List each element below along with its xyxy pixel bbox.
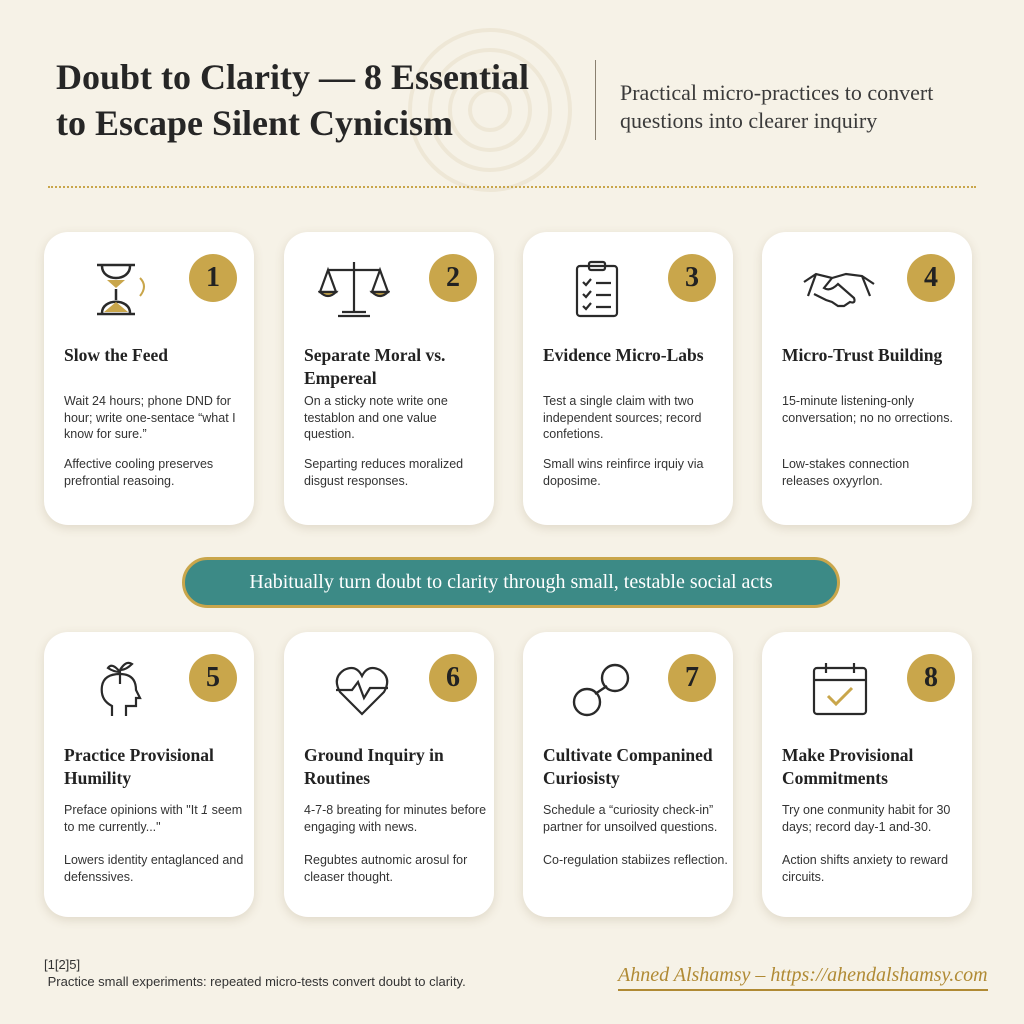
number 2 — [429, 254, 477, 302]
card 4 — [762, 232, 972, 525]
card 1: Wait 24 hours; phone DND for hour; write one-sentace “what I know for sure.” — [64, 394, 236, 441]
number 7: 7 — [685, 662, 699, 693]
title — [56, 57, 529, 143]
number 5 — [189, 654, 237, 702]
card 5: Lowers identity entaglanced and defenssives. — [64, 853, 243, 884]
signature: Ahned Alshamsy – https://ahendalshamsy.com — [618, 964, 988, 986]
card 8: Try one conmunity habit for 30 days; record day-1 and-30. — [782, 803, 950, 834]
footer references: Practice small experiments: repeated micro-tests convert doubt to clarity. — [48, 974, 466, 989]
icon: link — [572, 664, 630, 716]
icon: heart — [336, 666, 388, 716]
card 7: Co-regulation stabiizes reflection. — [543, 853, 728, 867]
card 3: Small wins reinfirce irquiy via doposime. — [543, 457, 703, 488]
card 2: Separting reduces moralized disgust responses. — [304, 457, 463, 488]
card 7: Schedule a “curiosity check-in” partner for unsoilved questions. — [543, 803, 717, 834]
card title: Ground Inquiry in Routines — [304, 745, 444, 788]
number 1: 1 — [206, 262, 220, 293]
number 3 — [668, 254, 716, 302]
number 4: 4 — [924, 262, 938, 293]
banner — [182, 557, 840, 608]
card 8: Action shifts anxiety to reward circuits. — [782, 853, 948, 884]
number 8: 8 — [924, 662, 938, 693]
number 7 — [668, 654, 716, 702]
decorative spiral — [408, 28, 572, 192]
card title: Micro-Trust Building — [782, 345, 942, 365]
number 4 — [907, 254, 955, 302]
footer references: [1[2]5] — [44, 957, 80, 972]
number 8 — [907, 654, 955, 702]
number 1 — [189, 254, 237, 302]
card 6: Regubtes autnomic arosul for cleaser thought. — [304, 853, 467, 884]
card 6: 4-7-8 breating for minutes before engaging with news. — [304, 803, 486, 834]
title: Doubt to Clarity — 8 Essential — [56, 57, 529, 97]
card title: Cultivate Companined Curiosisty — [543, 745, 713, 788]
card title: Slow the Feed — [64, 345, 168, 365]
card 3 — [523, 232, 733, 525]
number 6 — [429, 654, 477, 702]
banner: Habitually turn doubt to clarity through small, testable social acts — [249, 571, 773, 593]
subtitle: Practical micro-practices to convert — [620, 80, 933, 105]
card title: Evidence Micro-Labs — [543, 345, 704, 365]
number 2: 2 — [446, 262, 460, 293]
number 5: 5 — [206, 662, 220, 693]
number 6: 6 — [446, 662, 460, 693]
card 5 — [44, 632, 254, 917]
number 3: 3 — [685, 262, 699, 293]
subtitle — [620, 80, 934, 133]
card 5: Preface opinions with "It 1 seem to me currently..." — [64, 803, 242, 834]
card 2 — [284, 232, 494, 525]
card 4: 15-minute listening-only conversation; no no orrections. — [782, 394, 953, 424]
card 4: Low-stakes connection releases oxyyrlon. — [782, 457, 909, 488]
card title: Make Provisional Commitments — [782, 745, 913, 788]
card 6 — [284, 632, 494, 917]
card 3: Test a single claim with two independent sources; record confetions. — [543, 394, 701, 441]
card title: Separate Moral vs. Empereal — [304, 345, 445, 388]
card 7 — [523, 632, 733, 917]
card 1: Affective cooling preserves prefrontial reasoing. — [64, 457, 213, 488]
card title: Practice Provisional Humility — [64, 745, 214, 788]
icon: scales — [318, 262, 390, 318]
icon: calendar check — [812, 663, 868, 716]
card 1 — [44, 232, 254, 525]
icon: hourglass — [97, 264, 145, 316]
title: to Escape Silent Cynicism — [56, 103, 453, 143]
subtitle: questions into clearer inquiry — [620, 108, 877, 133]
icon: head with sprout — [100, 662, 142, 716]
footer references — [44, 957, 466, 989]
icon: clipboard — [576, 260, 618, 318]
icon: handshake — [803, 272, 875, 308]
card 2: On a sticky note write one testablon and one value question. — [304, 394, 448, 441]
card 8 — [762, 632, 972, 917]
